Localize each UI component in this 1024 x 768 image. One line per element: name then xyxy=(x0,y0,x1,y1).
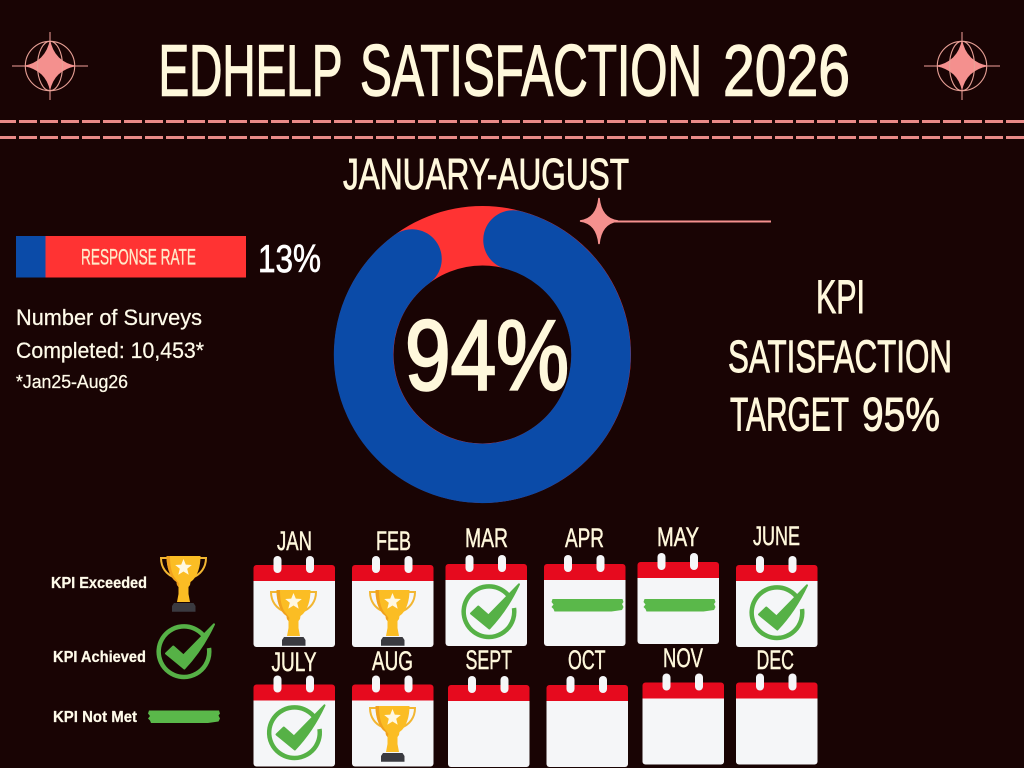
month: February, exceeded: FEB xyxy=(376,526,411,556)
month: July, achieved xyxy=(254,647,335,766)
title xyxy=(158,32,850,112)
legend: KPI achieved: KPI Achieved xyxy=(53,649,146,666)
month: November, empty xyxy=(642,643,724,764)
month: December, empty xyxy=(736,645,818,764)
month: August, exceeded: AUG xyxy=(372,646,413,676)
legend: KPI exceeded: KPI Exceeded xyxy=(51,575,147,592)
icon: left sparkle globe xyxy=(12,32,88,100)
month: August, exceeded xyxy=(352,646,434,766)
month: March, achieved: MAR xyxy=(465,523,508,553)
text block: KPI target: TARGET xyxy=(730,388,849,440)
panel: response rate xyxy=(16,236,321,281)
text block: KPI target: KPI xyxy=(816,270,865,323)
month: June, achieved xyxy=(736,521,818,647)
month: May, not met xyxy=(638,522,719,644)
response rate bar xyxy=(16,236,246,278)
text block: KPI target: 95% xyxy=(862,388,940,440)
month: October, empty: OCT xyxy=(568,645,606,675)
month: March, achieved xyxy=(446,523,527,646)
month: September, empty: SEPT xyxy=(466,645,512,675)
title: SATISFACTION xyxy=(360,32,702,112)
donut chart: 94 percent satisfaction xyxy=(364,236,601,473)
title: EDHELP xyxy=(158,32,342,112)
text block: KPI target xyxy=(728,270,952,440)
text block: surveys completed: Completed: 10,453* xyxy=(16,338,204,363)
legend: KPI not met xyxy=(53,709,220,726)
month: April, not met: APR xyxy=(565,523,604,553)
month: July, achieved: JULY xyxy=(272,647,316,677)
donut value: 94% xyxy=(405,300,569,410)
title: 2026 xyxy=(723,32,850,112)
icon: right sparkle globe xyxy=(924,32,1000,100)
month: September, empty xyxy=(448,645,530,767)
response rate bar: RESPONSE RATE xyxy=(81,244,196,270)
text block: surveys completed: *Jan25-Aug26 xyxy=(16,372,128,392)
text block: surveys completed: Number of Surveys xyxy=(16,305,202,330)
month: December, empty: DEC xyxy=(756,645,794,675)
month: January, exceeded: JAN xyxy=(277,526,312,556)
legend: KPI not met: KPI Not Met xyxy=(53,709,137,726)
month: June, achieved: JUNE xyxy=(753,521,800,551)
response rate value: 13% xyxy=(258,238,321,281)
legend: KPI achieved xyxy=(53,624,214,677)
month: May, not met: MAY xyxy=(657,522,699,552)
month: October, empty xyxy=(546,645,628,767)
subtitle: period: JANUARY-AUGUST xyxy=(343,150,629,199)
icon: sparkle with line xyxy=(580,198,771,244)
legend xyxy=(51,556,220,726)
text block: surveys completed xyxy=(16,305,204,392)
legend: KPI exceeded xyxy=(51,556,206,612)
month: January, exceeded xyxy=(254,526,335,647)
month: February, exceeded xyxy=(352,526,434,647)
month: November, empty: NOV xyxy=(663,643,703,673)
month: April, not met xyxy=(544,523,626,646)
